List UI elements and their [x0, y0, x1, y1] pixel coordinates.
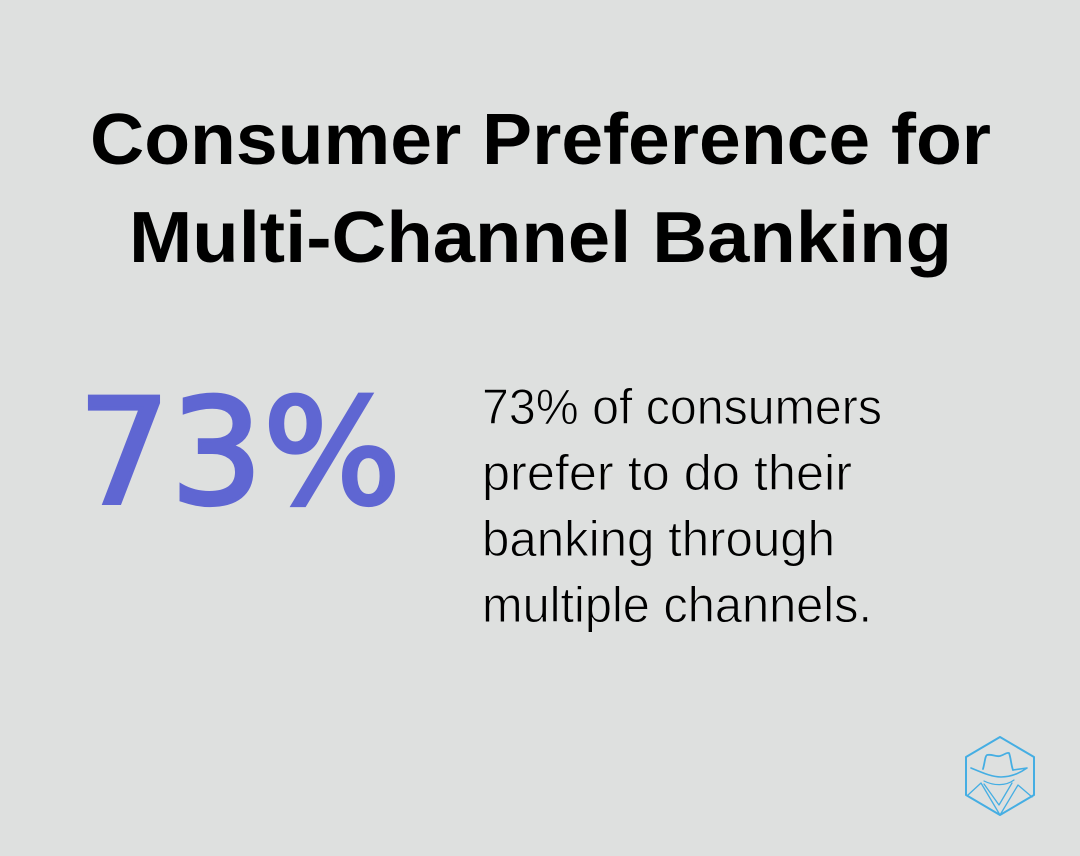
title: [90, 100, 991, 278]
icon: hexagon logo with hat and coat: [966, 737, 1034, 815]
description text: 73% of consumers: [482, 379, 882, 435]
icon: hat crown: [983, 753, 1013, 770]
description text: multiple channels.: [482, 577, 872, 633]
icon: hexagon outline: [966, 737, 1034, 815]
description text: banking through: [482, 511, 835, 567]
description text: prefer to do their: [482, 445, 852, 501]
title: Consumer Preference for: [90, 100, 991, 180]
big statistic: 73%: 73%: [78, 368, 401, 538]
icon: hat shadow: [984, 780, 1014, 785]
title: Multi-Channel Banking: [129, 198, 952, 278]
description text: [482, 379, 882, 633]
icon: coat lapels: [968, 783, 1032, 815]
icon: hat brim: [971, 768, 1027, 777]
